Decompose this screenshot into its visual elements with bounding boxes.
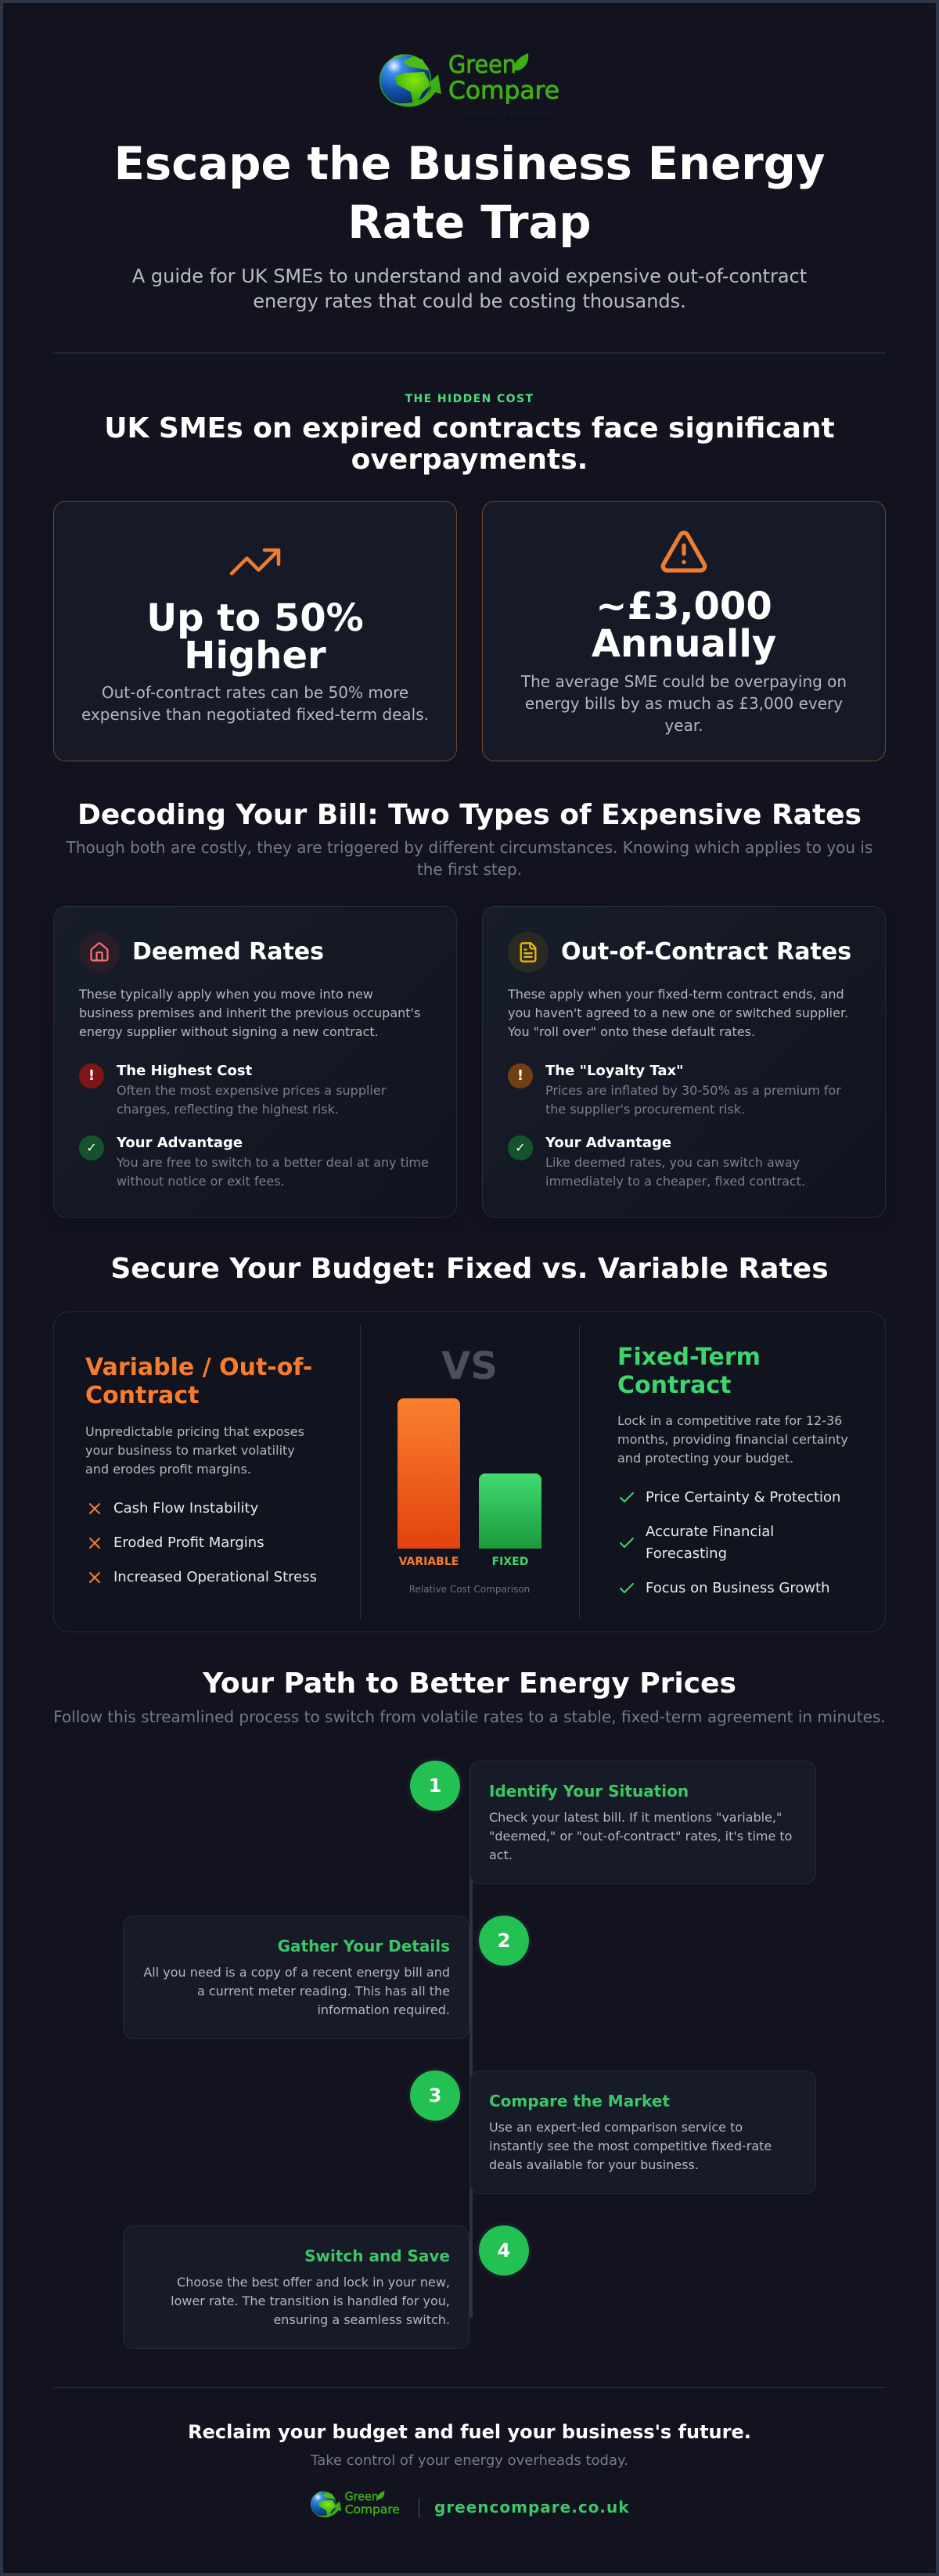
title (114, 138, 825, 249)
step text (171, 2275, 450, 2327)
item text: immediately to a cheaper, fixed contract. (545, 1174, 805, 1189)
badge: warning (508, 1063, 533, 1088)
step 4 number: 4 (498, 2240, 510, 2261)
footer headline: Reclaim your budget and fuel your business's future. (188, 2421, 751, 2443)
step text: a current meter reading. This has all the (197, 1984, 450, 1999)
panel: deemed rates (53, 906, 457, 1218)
stat: up to 50% higher: Higher (184, 634, 326, 678)
item text: You are free to switch to a better deal at any time (117, 1155, 429, 1170)
step title: Gather Your Details (278, 1937, 450, 1955)
logo (380, 53, 559, 116)
item text: charges, reflecting the highest risk. (117, 1102, 339, 1117)
section intro: the first step. (417, 860, 522, 879)
card description: you haven't agreed to a new one or switched supplier. (508, 1006, 848, 1020)
step 3 card (470, 2071, 816, 2194)
icon: x (89, 1503, 100, 1514)
bar label: variable: VARIABLE (399, 1556, 459, 1568)
item text: the supplier's procurement risk. (545, 1102, 745, 1117)
stat: up to 50% higher: Up to 50% (146, 596, 364, 640)
step 2 number (479, 1916, 529, 1966)
stat description (81, 683, 429, 724)
step title: Identify Your Situation (489, 1782, 689, 1801)
step 1 number (410, 1761, 460, 1811)
card description: These apply when your fixed-term contract ends, and (508, 987, 844, 1002)
icon: document (508, 932, 549, 973)
fixed description (617, 1413, 848, 1466)
card description: energy supplier without signing a new contract. (79, 1024, 379, 1039)
panel: 3000 annually (482, 501, 886, 761)
step 1 number: 1 (429, 1775, 441, 1797)
item text: without notice or exit fees. (117, 1174, 285, 1189)
badge: check: ✓ (515, 1140, 526, 1155)
icon: check (620, 1492, 634, 1502)
icon: x (89, 1538, 100, 1549)
badge: warning: ! (517, 1067, 523, 1084)
step text: "deemed," or "out-of-contract" rates, it's time to (489, 1829, 792, 1844)
list item: Cash Flow Instability (113, 1500, 258, 1516)
item text (545, 1083, 841, 1117)
step 4 number (479, 2225, 529, 2276)
variable column heading: Contract (85, 1382, 199, 1409)
item title: Your Advantage (545, 1135, 671, 1151)
step text: lower rate. The transition is handled for you, (171, 2294, 450, 2308)
item text (117, 1155, 429, 1189)
icon: check (620, 1583, 634, 1593)
badge: check: ✓ (86, 1140, 97, 1155)
item text (117, 1083, 387, 1117)
step text: act. (489, 1847, 513, 1862)
step 2 number: 2 (498, 1930, 510, 1952)
list item: Accurate Financial (646, 1524, 774, 1540)
heading: path to better prices: Your Path to Better Energy Prices (203, 1668, 736, 1700)
variable description (85, 1424, 304, 1477)
step 3 number (410, 2071, 460, 2121)
list item: Forecasting (646, 1545, 727, 1562)
bar: variable (398, 1398, 460, 1549)
stat description (521, 672, 847, 735)
item text: Often the most expensive prices a supplier (117, 1083, 386, 1098)
step text: instantly see the most competitive fixed-rate (489, 2139, 772, 2153)
timeline line (470, 1784, 473, 2318)
step 4 card (123, 2225, 470, 2349)
step 1 card (470, 1761, 816, 1884)
footer logo: Compare (345, 2502, 400, 2517)
stat description: Out-of-contract rates can be 50% more (102, 683, 408, 702)
fixed column heading (617, 1344, 761, 1399)
title: Rate Trap (347, 196, 592, 249)
stat: 3000 annually: Annually (592, 622, 776, 666)
step text: ensuring a seamless switch. (273, 2312, 450, 2327)
step 2 card (123, 1916, 470, 2039)
fixed description: Lock in a competitive rate for 12-36 (617, 1413, 842, 1428)
heading: overpayments: overpayments. (351, 444, 588, 476)
card description (78, 987, 420, 1039)
badge: warning: ! (88, 1067, 95, 1084)
subtitle: A guide for UK SMEs to understand and avoid expensive out-of-contract (132, 265, 807, 287)
icon: x (89, 1572, 100, 1583)
icon: warning triangle (660, 531, 707, 573)
stat description: energy bills by as much as £3,000 every (525, 694, 843, 713)
heading: decoding your bill: Decoding Your Bill: Two Types of Expensive Rates (77, 799, 862, 831)
subtitle: energy rates that could be costing thousands. (253, 290, 686, 312)
variable column heading (85, 1354, 312, 1409)
fixed column heading: Fixed-Term (617, 1344, 761, 1371)
bar label: fixed: FIXED (492, 1556, 528, 1568)
step title: Switch and Save (304, 2247, 450, 2265)
footer logo (311, 2491, 400, 2522)
chart caption: Relative Cost Comparison (409, 1584, 530, 1595)
stat: up to 50% higher (146, 596, 364, 678)
step text (143, 1965, 450, 2017)
item text: Like deemed rates, you can switch away (545, 1155, 800, 1170)
subtitle (132, 265, 807, 312)
bar chart: relative cost (398, 1398, 541, 1595)
icon: trending up (230, 548, 280, 576)
stat: 3000 annually (592, 585, 776, 666)
step text: Choose the best offer and lock in your new, (177, 2275, 450, 2290)
item title: The "Loyalty Tax" (545, 1063, 684, 1079)
badge: check (508, 1135, 533, 1160)
card title: Out-of-Contract Rates (561, 938, 851, 966)
step text: Use an expert-led comparison service to (489, 2120, 743, 2135)
card description: These typically apply when you move into new (79, 987, 373, 1002)
logo: INVESTING IN YOUR FUTURE (464, 111, 554, 116)
stat description: The average SME could be overpaying on (521, 672, 847, 691)
step 3 number: 3 (429, 2085, 441, 2106)
step text: All you need is a copy of a recent energy bill and (143, 1965, 450, 1980)
step text: Check your latest bill. If it mentions "variable," (489, 1810, 782, 1825)
panel: out-of-contract rates (482, 906, 886, 1218)
item title: The Highest Cost (117, 1063, 252, 1079)
bar: fixed (479, 1473, 541, 1549)
card description (507, 987, 848, 1039)
item title: Your Advantage (117, 1135, 243, 1151)
step text (489, 1810, 792, 1862)
step text (489, 2120, 772, 2172)
section intro: Though both are costly, they are triggered by different circumstances. Knowing which applies to you is (67, 838, 872, 857)
variable description: and erodes profit margins. (85, 1462, 251, 1477)
variable column heading: Variable / Out-of- (85, 1354, 312, 1381)
footer subline: Take control of your energy overheads today. (311, 2452, 628, 2469)
step title: Compare the Market (489, 2092, 670, 2110)
fixed description: and protecting your budget. (617, 1451, 793, 1466)
eyebrow: the hidden cost: THE HIDDEN COST (405, 393, 534, 405)
panel: fixed vs variable comparison (53, 1311, 886, 1632)
step text: information required. (317, 2002, 450, 2017)
card description: business premises and inherit the previous occupant's (79, 1006, 420, 1020)
list item: Price Certainty & Protection (646, 1489, 840, 1506)
badge: warning (79, 1063, 104, 1088)
item text (545, 1155, 805, 1189)
list item: Focus on Business Growth (646, 1580, 830, 1596)
list item: Increased Operational Stress (113, 1569, 317, 1585)
stat description: year. (664, 716, 703, 735)
heading: secure your budget: Secure Your Budget: Fixed vs. Variable Rates (110, 1253, 829, 1285)
badge: check (79, 1135, 104, 1160)
variable description: your business to market volatility (85, 1443, 295, 1458)
item text: Prices are inflated by 30-50% as a premium for (545, 1083, 841, 1098)
stat: 3000 annually: ~£3,000 (595, 585, 772, 628)
stat description: expensive than negotiated fixed-term deals. (81, 705, 429, 724)
panel: up to 50% higher (53, 501, 457, 761)
section intro: Follow this streamlined process to switch from volatile rates to a stable, fixed-term agreement in minutes. (53, 1707, 886, 1726)
heading: overpayments: UK SMEs on expired contracts face significant (104, 412, 835, 444)
card title: Deemed Rates (132, 938, 324, 966)
step text: deals available for your business. (489, 2157, 699, 2172)
list item: Eroded Profit Margins (113, 1534, 264, 1551)
fixed column heading: Contract (617, 1372, 731, 1399)
list item (646, 1524, 774, 1562)
logo: Compare (448, 77, 559, 105)
fixed description: months, providing financial certainty (617, 1432, 848, 1447)
icon: house (79, 932, 120, 973)
title: Escape the Business Energy (114, 138, 825, 190)
footer website link: greencompare.co.uk (434, 2498, 630, 2517)
heading: overpayments (104, 412, 835, 476)
footer logo: INVESTING IN YOUR FUTURE (353, 2519, 398, 2522)
icon: check (620, 1538, 634, 1548)
card description: You "roll over" onto these default rates. (508, 1024, 755, 1039)
section intro (66, 838, 872, 879)
variable description: Unpredictable pricing that exposes (85, 1424, 304, 1439)
vs label: VS (441, 1344, 498, 1388)
